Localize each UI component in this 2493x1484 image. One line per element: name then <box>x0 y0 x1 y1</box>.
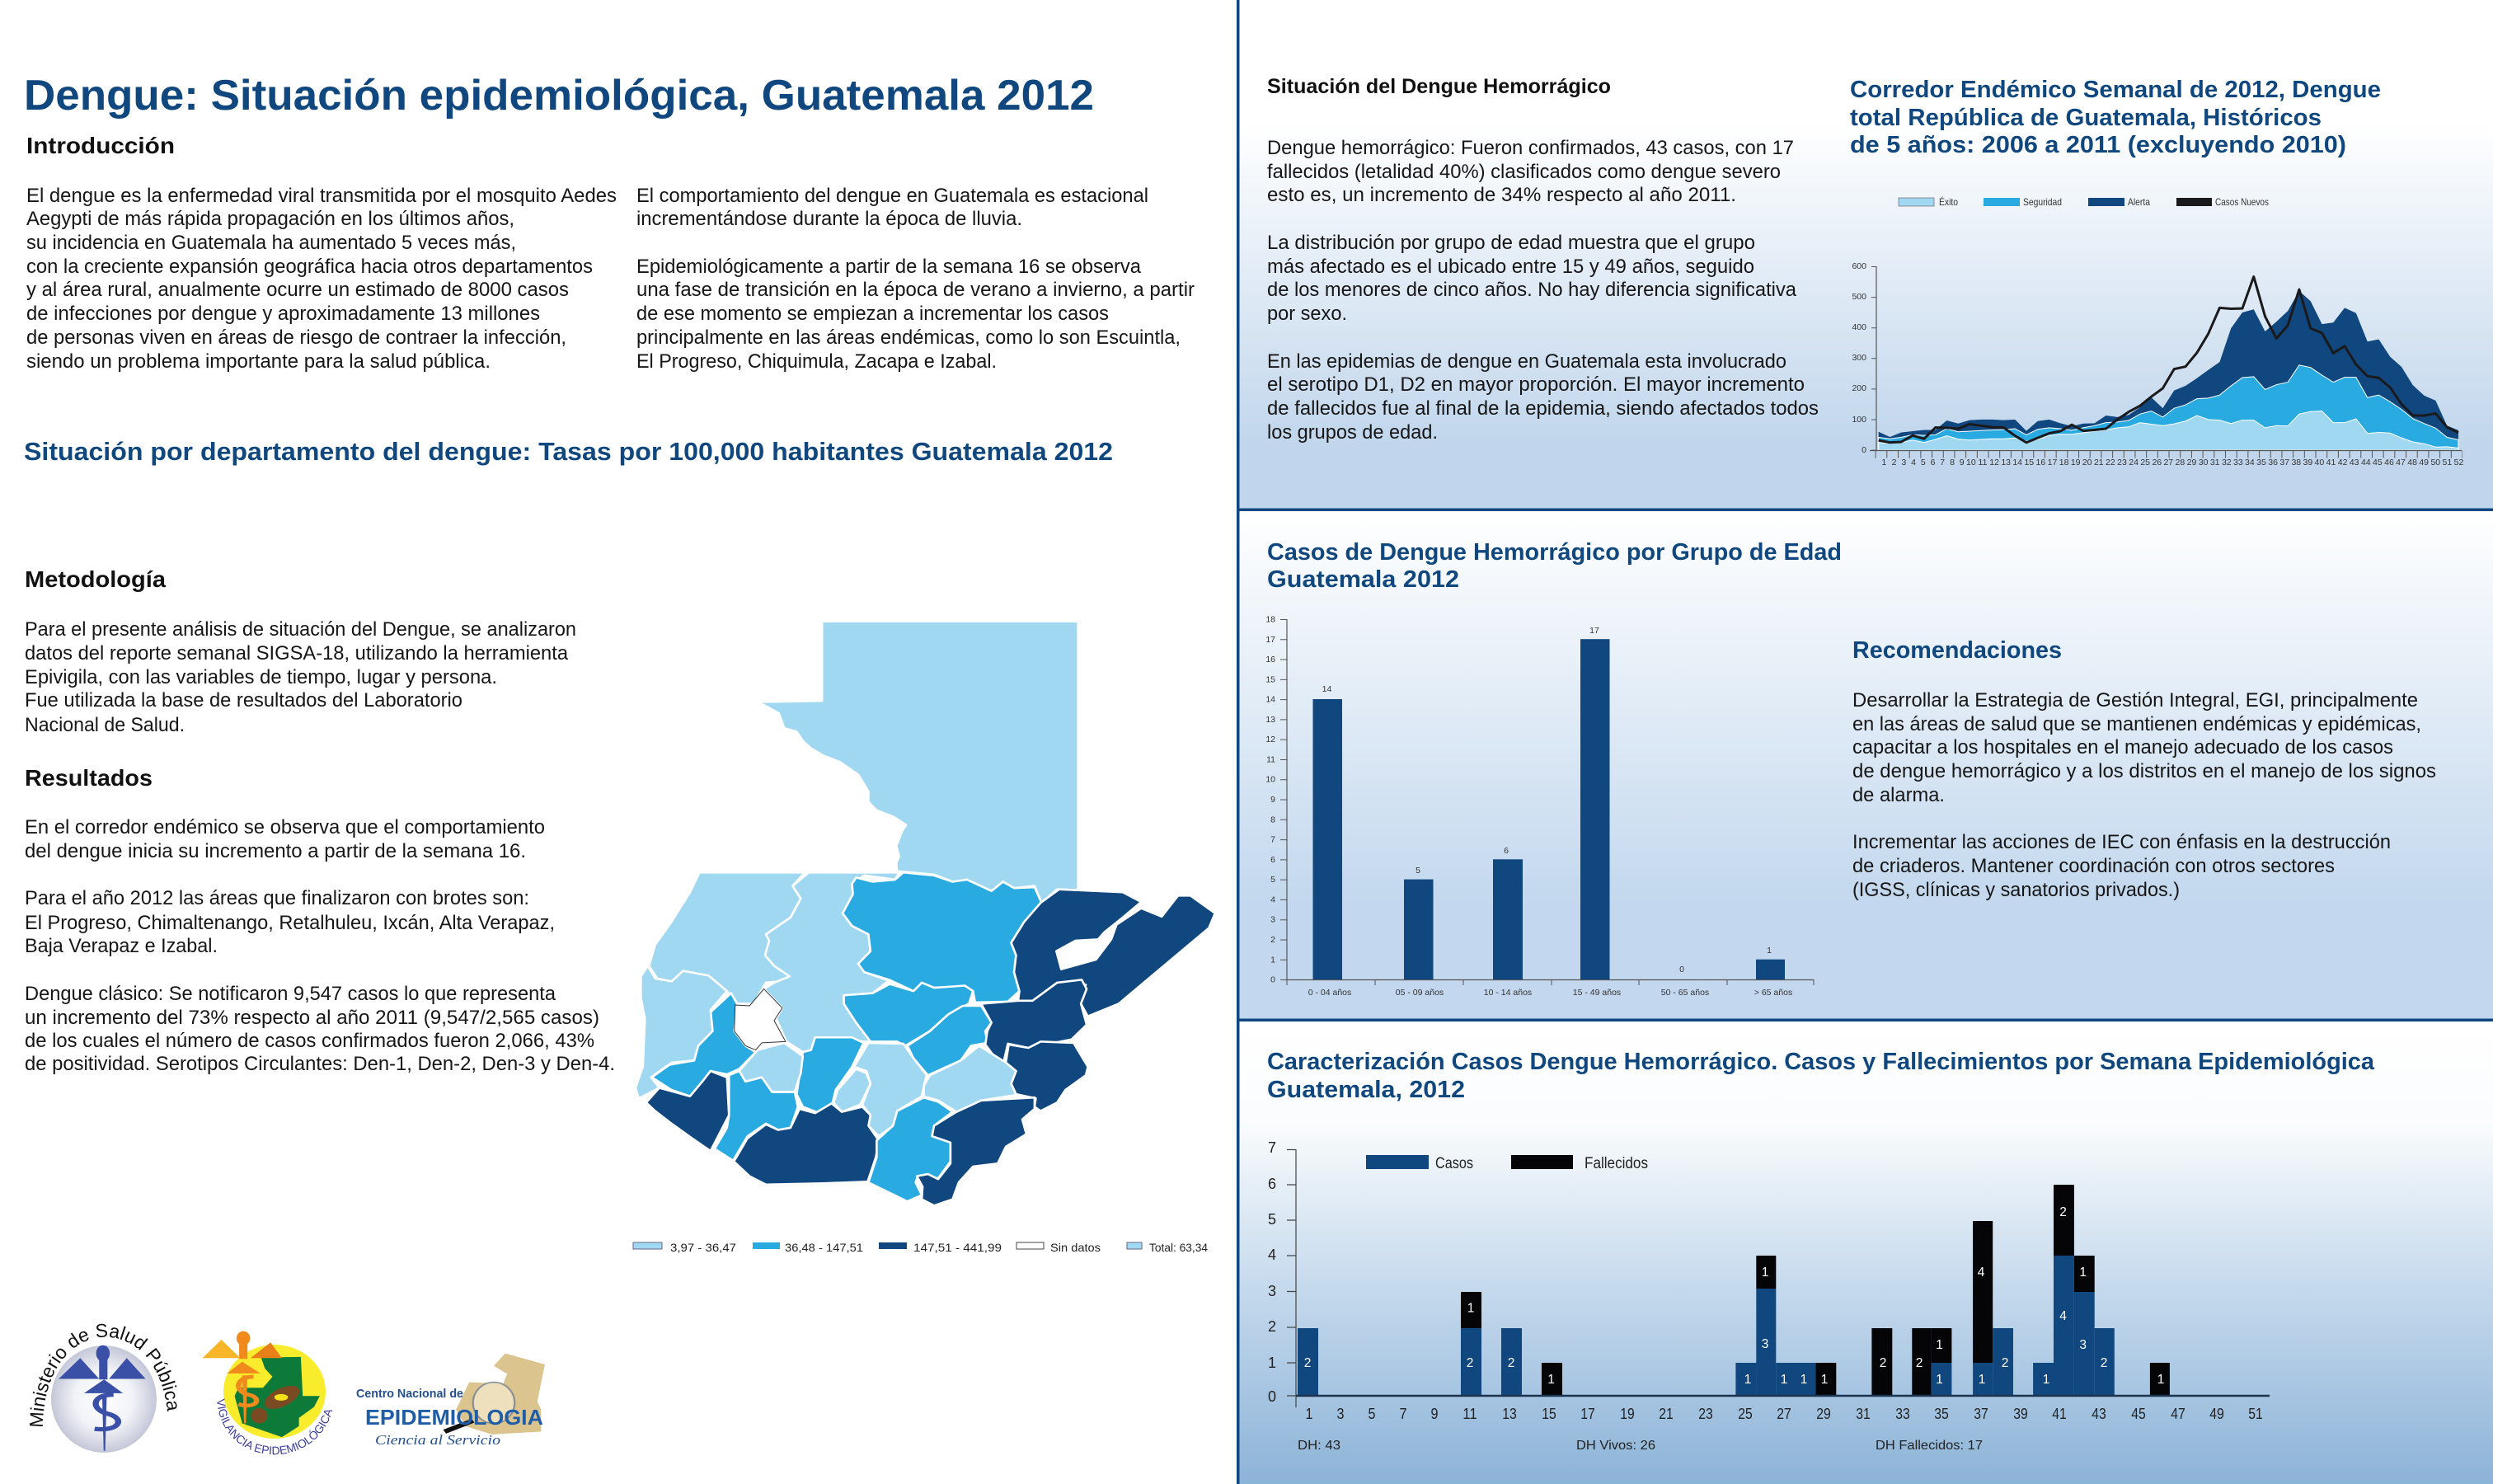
chart: corredor endémico area and line: 8 <box>1950 458 1955 467</box>
text block: metodología: Para el presente análisis de situación del Dengue, se analizaron <box>25 618 576 641</box>
chart: corredor endémico area and line: 9 <box>1960 458 1965 467</box>
stacked bar chart: casos y fallecidos por semana: 1 <box>1306 1406 1312 1422</box>
chart: corredor endémico area and line: 27 <box>2163 458 2173 467</box>
chart: corredor endémico area and line: 22 <box>2106 458 2115 467</box>
stacked bar chart: casos y fallecidos por semana: 45 <box>2131 1406 2146 1422</box>
bar chart: grupo de edad: 10 - 14 años <box>1484 988 1532 998</box>
text block: recomendaciones: de alarma. <box>1852 784 1945 806</box>
bar chart: grupo de edad <box>1265 615 1814 998</box>
chart: corredor endémico area and line: 44 <box>2361 458 2371 467</box>
chart: corredor endémico area and line: 30 <box>2199 458 2209 467</box>
heading: corredor endémico: total República de Guatemala, Históricos <box>1850 105 2322 131</box>
chart: corredor endémico area and line: 23 <box>2117 458 2127 467</box>
map legend: 147,51 - 441,99 <box>913 1241 1002 1254</box>
bar chart: grupo de edad: 7 <box>1270 835 1275 845</box>
stacked bar chart: casos y fallecidos por semana: 2 <box>2002 1356 2008 1370</box>
stacked bar chart: casos y fallecidos por semana: 3 <box>2079 1338 2087 1352</box>
chart: corredor endémico area and line: 35 <box>2256 458 2266 467</box>
text block: recomendaciones: en las áreas de salud que se mantienen endémicas y epidémicas, <box>1852 713 2421 735</box>
text block: dengue hemorrágico: fallecidos (letalidad 40%) clasificados como dengue severo <box>1267 161 1781 183</box>
stacked bar chart: casos y fallecidos por semana: 39 <box>2013 1406 2028 1422</box>
text block: introducción column 1: siendo un problema importante para la salud pública. <box>26 350 491 373</box>
heading: corredor endémico: Corredor Endémico Semanal de 2012, Dengue <box>1850 77 2381 103</box>
chart: corredor endémico area and line: 11 <box>1979 458 1988 467</box>
stacked bar chart: casos y fallecidos por semana: 17 <box>1580 1406 1595 1422</box>
title: Dengue: Situación epidemiológica, Guatemala 2012 <box>24 72 1094 120</box>
stacked bar chart: casos y fallecidos por semana: 1 <box>2043 1373 2049 1387</box>
text block: dengue hemorrágico <box>1267 137 1819 444</box>
text block: dengue hemorrágico: La distribución por grupo de edad muestra que el grupo <box>1267 232 1755 254</box>
text block: introducción column 2: El comportamiento del dengue en Guatemala es estacional <box>636 185 1148 207</box>
chart: corredor endémico area and line: 28 <box>2176 458 2185 467</box>
bar chart: grupo de edad: 0 <box>1270 975 1275 985</box>
text block: metodología: Fue utilizada la base de resultados del Laboratorio <box>25 689 462 711</box>
map legend: Total: 63,34 <box>1149 1241 1208 1254</box>
stacked bar chart: casos y fallecidos por semana: 11 <box>1462 1406 1477 1422</box>
stacked bar chart: casos y fallecidos por semana: 49 <box>2209 1406 2224 1422</box>
text block: dengue hemorrágico: de los menores de cinco años. No hay diferencia significativa <box>1267 279 1797 301</box>
stacked bar chart: casos y fallecidos por semana: 7 <box>1400 1406 1406 1422</box>
heading: resultados: Resultados <box>25 765 153 791</box>
chart: corredor endémico area and line: 37 <box>2279 458 2289 467</box>
panel: metodología <box>25 566 576 736</box>
heading: casos por grupo de edad <box>1267 539 1842 593</box>
stacked bar chart: casos y fallecidos por semana: 2 <box>1916 1356 1923 1370</box>
chart: corredor endémico area and line: 20 <box>2082 458 2092 467</box>
chart: corredor endémico area and line: 47 <box>2396 458 2406 467</box>
bar chart: grupo de edad: 15 - 49 años <box>1573 988 1621 998</box>
chart: corredor endémico area and line: 600 <box>1852 261 1866 271</box>
bar chart: grupo de edad: 6 <box>1504 846 1509 856</box>
text block: metodología: Epivigila, con las variables de tiempo, lugar y persona. <box>25 666 497 688</box>
legend: corredor endémico: Casos Nuevos <box>2215 196 2269 208</box>
panel: casos por grupo de edad y recomendaciones <box>1239 511 2493 1019</box>
heading: casos por grupo de edad: Casos de Dengue Hemorrágico por Grupo de Edad <box>1267 539 1842 566</box>
text block: introducción column 1: con la creciente expansión geográfica hacia otros departamentos <box>26 256 593 278</box>
stacked bar chart: casos y fallecidos por semana <box>1268 1139 2270 1422</box>
chart: corredor endémico area and line: 7 <box>1940 458 1945 467</box>
bar chart: grupo de edad: 1 <box>1270 955 1275 965</box>
stacked bar chart: casos y fallecidos por semana: 51 <box>2248 1406 2263 1422</box>
text block: recomendaciones: Desarrollar la Estrategia de Gestión Integral, EGI, principalmente <box>1852 689 2418 711</box>
stacked bar chart: casos y fallecidos por semana: 35 <box>1934 1406 1949 1422</box>
stacked bar chart: casos y fallecidos por semana: 6 <box>1268 1176 1276 1192</box>
text block: dengue hemorrágico: el serotipo D1, D2 en mayor proporción. El mayor incremento <box>1267 373 1805 396</box>
stacked bar chart: casos y fallecidos por semana: 23 <box>1698 1406 1713 1422</box>
stacked bar chart: casos y fallecidos por semana: 13 <box>1502 1406 1517 1422</box>
stacked bar chart: casos y fallecidos por semana: 2 <box>1304 1356 1311 1370</box>
bar chart: grupo de edad: 0 - 04 años <box>1308 988 1351 998</box>
text block: introducción column 2: Epidemiológicamente a partir de la semana 16 se observa <box>636 256 1142 278</box>
chart: corredor endémico area and line: 29 <box>2187 458 2196 467</box>
text block: dengue hemorrágico: los grupos de edad. <box>1267 421 1438 444</box>
chart: corredor endémico area and line: 16 <box>2036 458 2045 467</box>
bar chart: grupo de edad: 12 <box>1265 735 1275 744</box>
bar chart: grupo de edad: 1 <box>1767 946 1772 956</box>
text block: introducción column 2: El Progreso, Chiquimula, Zacapa e Izabal. <box>636 350 997 373</box>
stacked bar chart: casos y fallecidos por semana: 2 <box>2101 1356 2107 1370</box>
heading: corredor endémico: de 5 años: 2006 a 2011 (excluyendo 2010) <box>1850 132 2346 158</box>
chart: corredor endémico area and line: 46 <box>2384 458 2394 467</box>
map: Guatemala departments <box>636 622 1215 1205</box>
chart: corredor endémico area and line: 200 <box>1852 383 1866 393</box>
map legend: 36,48 - 147,51 <box>785 1241 863 1254</box>
map legend: Sin datos <box>1050 1241 1101 1254</box>
text block: introducción column 2 <box>636 185 1195 373</box>
chart: corredor endémico area and line: 38 <box>2291 458 2301 467</box>
stacked bar chart: casos y fallecidos por semana: 21 <box>1659 1406 1674 1422</box>
stacked bar chart: casos y fallecidos por semana: 31 <box>1856 1406 1871 1422</box>
legend: corredor endémico <box>1899 195 2269 208</box>
bar chart: grupo de edad: 14 <box>1265 695 1275 705</box>
stacked bar chart: casos y fallecidos por semana: 41 <box>2052 1406 2067 1422</box>
logo: Centro Nacional de Epidemiología: Ciencia al Servicio <box>375 1432 500 1448</box>
chart: corredor endémico area and line: 32 <box>2222 458 2232 467</box>
bar chart: grupo de edad: 16 <box>1265 655 1275 665</box>
map legend <box>633 1241 1208 1254</box>
legend: casos y fallecidos: Fallecidos <box>1585 1155 1648 1172</box>
stacked bar chart: casos y fallecidos por semana: 4 <box>1978 1266 1985 1280</box>
text block: introducción column 1 <box>26 185 617 373</box>
bar chart: grupo de edad: > 65 años <box>1754 988 1792 998</box>
chart: corredor endémico area and line: 5 <box>1921 458 1926 467</box>
stacked bar chart: casos y fallecidos por semana: 7 <box>1268 1139 1276 1156</box>
chart: corredor endémico area and line: 26 <box>2152 458 2162 467</box>
text block: introducción column 2: una fase de transición en la época de verano a invierno, a partir <box>636 279 1195 301</box>
logo: Centro Nacional de Epidemiología: EPIDEMIOLOGIA <box>365 1405 543 1430</box>
text block: dengue hemorrágico: por sexo. <box>1267 303 1347 325</box>
stacked bar chart: casos y fallecidos por semana: 1 <box>1547 1373 1555 1387</box>
panel: situación del dengue hemorrágico y corredor endémico <box>1239 0 2493 509</box>
stacked bar chart: casos y fallecidos por semana: 1 <box>1781 1373 1787 1387</box>
chart: corredor endémico area and line: 1 <box>1881 458 1886 467</box>
text block: recomendaciones: de dengue hemorrágico y a los distritos en el manejo de los signos <box>1852 760 2436 782</box>
stacked bar chart: casos y fallecidos por semana: 2 <box>1268 1318 1276 1335</box>
chart: corredor endémico area and line: 0 <box>1862 445 1866 455</box>
bar chart: grupo de edad: 05 - 09 años <box>1396 988 1444 998</box>
stacked bar chart: casos y fallecidos por semana: 27 <box>1777 1406 1791 1422</box>
legend: corredor endémico: Éxito <box>1939 195 1958 208</box>
stats: totales: DH Fallecidos: 17 <box>1876 1439 1983 1453</box>
panel: casos y fallecimientos por semana <box>1239 1021 2493 1484</box>
bar chart: grupo de edad: 17 <box>1265 635 1275 645</box>
text block: introducción column 2: de ese momento se empiezan a incrementar los casos <box>636 303 1109 325</box>
chart: corredor endémico area and line: 31 <box>2210 458 2220 467</box>
bar chart: grupo de edad: 15 <box>1265 674 1275 684</box>
chart: corredor endémico area and line: 18 <box>2059 458 2069 467</box>
stacked bar chart: casos y fallecidos por semana: 1 <box>1821 1373 1828 1387</box>
heading: caracterización casos: Caracterización Casos Dengue Hemorrágico. Casos y Fallecimientos por Semana Epidemiológica <box>1267 1049 2375 1075</box>
text block: resultados: del dengue inicia su incremento a partir de la semana 16. <box>25 840 526 862</box>
stacked bar chart: casos y fallecidos por semana: 5 <box>1369 1406 1375 1422</box>
chart: corredor endémico area and line: 50 <box>2430 458 2440 467</box>
heading: metodología: Metodología <box>25 566 166 592</box>
chart: corredor endémico area and line: 500 <box>1852 292 1866 302</box>
chart: corredor endémico area and line: 13 <box>2001 458 2011 467</box>
text block: metodología: datos del reporte semanal SIGSA-18, utilizando la herramienta <box>25 642 569 665</box>
chart: corredor endémico area and line: 300 <box>1852 353 1866 363</box>
chart: corredor endémico area and line: 10 <box>1966 458 1976 467</box>
stacked bar chart: casos y fallecidos por semana: 19 <box>1620 1406 1635 1422</box>
stacked bar chart: casos y fallecidos por semana: 37 <box>1974 1406 1988 1422</box>
text block: resultados: Para el año 2012 las áreas que finalizaron con brotes son: <box>25 887 529 909</box>
chart: corredor endémico area and line: 400 <box>1852 322 1866 332</box>
heading: casos por grupo de edad: Guatemala 2012 <box>1267 566 1459 593</box>
chart: corredor endémico area and line: 4 <box>1911 458 1916 467</box>
chart: corredor endémico area and line: 14 <box>2012 458 2022 467</box>
stacked bar chart: casos y fallecidos por semana: 2 <box>1880 1356 1886 1370</box>
stacked bar chart: casos y fallecidos por semana: 33 <box>1895 1406 1910 1422</box>
stacked bar chart: casos y fallecidos por semana: 4 <box>1268 1247 1276 1263</box>
bar chart: grupo de edad: 14 <box>1322 684 1331 694</box>
text block: resultados: El Progreso, Chimaltenango, Retalhuleu, Ixcán, Alta Verapaz, <box>25 912 555 934</box>
bar chart: grupo de edad: 8 <box>1270 815 1275 824</box>
chart: corredor endémico area and line: 39 <box>2303 458 2312 467</box>
chart: corredor endémico area and line: 33 <box>2233 458 2243 467</box>
stacked bar chart: casos y fallecidos por semana: 3 <box>1337 1406 1344 1422</box>
text block: recomendaciones <box>1852 689 2436 901</box>
stacked bar chart: casos y fallecidos por semana: 1 <box>2157 1373 2164 1387</box>
map legend: 3,97 - 36,47 <box>670 1241 736 1254</box>
bar chart: grupo de edad: 2 <box>1270 935 1275 945</box>
text block: resultados: En el corredor endémico se observa que el comportamiento <box>25 816 545 838</box>
stacked bar chart: casos y fallecidos por semana: 4 <box>2059 1309 2067 1323</box>
legend: corredor endémico: Alerta <box>2128 196 2150 208</box>
chart: corredor endémico area and line: 43 <box>2350 458 2359 467</box>
text block: dengue hemorrágico: Dengue hemorrágico: Fueron confirmados, 43 casos, con 17 <box>1267 137 1794 159</box>
text block: recomendaciones: de criaderos. Mantener coordinación con otros sectores <box>1852 855 2335 877</box>
text block: recomendaciones: (IGSS, clínicas y sanatorios privados.) <box>1852 879 2180 901</box>
chart: corredor endémico area and line: 6 <box>1931 458 1936 467</box>
bar chart: grupo de edad: 5 <box>1270 875 1275 885</box>
text block: resultados: Dengue clásico: Se notificaron 9,547 casos lo que representa <box>25 983 556 1005</box>
stacked bar chart: casos y fallecidos por semana: 1 <box>1979 1373 1985 1387</box>
stacked bar chart: casos y fallecidos por semana: 47 <box>2171 1406 2185 1422</box>
bar chart: grupo de edad: 13 <box>1265 715 1275 725</box>
heading: recomendaciones: Recomendaciones <box>1852 637 2062 664</box>
chart: corredor endémico area and line: 17 <box>2048 458 2057 467</box>
bar chart: grupo de edad: 17 <box>1589 626 1599 636</box>
stacked bar chart: casos y fallecidos por semana: 43 <box>2092 1406 2106 1422</box>
stacked bar chart: casos y fallecidos por semana: 25 <box>1738 1406 1753 1422</box>
stacked bar chart: casos y fallecidos por semana: 0 <box>1268 1388 1276 1405</box>
text block: resultados: de positividad. Serotipos Circulantes: Den-1, Den-2, Den-3 y Den-4. <box>25 1053 615 1075</box>
chart: corredor endémico area and line: 34 <box>2245 458 2255 467</box>
panel: introducción <box>26 133 1195 373</box>
text block: recomendaciones: Incrementar las acciones de IEC con énfasis en la destrucción <box>1852 831 2391 853</box>
chart: corredor endémico area and line: 19 <box>2071 458 2081 467</box>
text block: introducción column 1: Aegypti de más rápida propagación en los últimos años, <box>26 208 514 230</box>
logo: Vigilancia Epidemiológica <box>203 1331 333 1454</box>
chart: corredor endémico area and line: 41 <box>2326 458 2336 467</box>
chart: corredor endémico area and line: 42 <box>2338 458 2348 467</box>
stacked bar chart: casos y fallecidos por semana: 5 <box>1268 1211 1276 1228</box>
stacked bar chart: casos y fallecidos por semana: 1 <box>1744 1373 1751 1387</box>
chart: corredor endémico area and line: 21 <box>2094 458 2104 467</box>
stats: totales <box>1298 1439 1983 1453</box>
bar chart: grupo de edad: 5 <box>1416 866 1420 876</box>
stacked bar chart: casos y fallecidos por semana: 29 <box>1816 1406 1831 1422</box>
chart: corredor endémico area and line: 3 <box>1901 458 1906 467</box>
bar chart: grupo de edad: 50 - 65 años <box>1661 988 1709 998</box>
chart: corredor endémico area and line: 48 <box>2407 458 2417 467</box>
bar chart: grupo de edad: 9 <box>1270 795 1275 805</box>
text block: resultados: Baja Verapaz e Izabal. <box>25 935 218 957</box>
chart: corredor endémico area and line: 45 <box>2373 458 2383 467</box>
text block: resultados: de los cuales el número de casos confirmados fueron 2,066, 43% <box>25 1030 594 1052</box>
text block: introducción column 2: principalmente en las áreas endémicas, como lo son Escuintla, <box>636 326 1181 349</box>
legend: casos y fallecidos: Casos <box>1435 1155 1473 1172</box>
text block: metodología: Nacional de Salud. <box>25 714 185 736</box>
text block: introducción column 1: su incidencia en Guatemala ha aumentado 5 veces más, <box>26 232 516 254</box>
stacked bar chart: casos y fallecidos por semana: 9 <box>1431 1406 1438 1422</box>
stacked bar chart: casos y fallecidos por semana: 3 <box>1762 1337 1768 1351</box>
text block: recomendaciones: capacitar a los hospitales en el manejo adecuado de los casos <box>1852 736 2393 758</box>
text block: dengue hemorrágico: más afectado es el ubicado entre 15 y 49 años, seguido <box>1267 256 1754 278</box>
chart: corredor endémico area and line: 40 <box>2315 458 2324 467</box>
bar chart: grupo de edad: 11 <box>1266 755 1275 765</box>
heading: corredor endémico <box>1850 77 2381 158</box>
chart: corredor endémico area and line: 2 <box>1892 458 1897 467</box>
heading: situación por departamento: Situación por departamento del dengue: Tasas por 100,000 habitantes Guatemala 2012 <box>24 437 1113 466</box>
bar chart: grupo de edad: 0 <box>1679 965 1684 974</box>
text block: resultados <box>25 816 615 1075</box>
stacked bar chart: casos y fallecidos por semana: 1 <box>1762 1266 1768 1280</box>
chart: corredor endémico area and line: 51 <box>2443 458 2452 467</box>
stacked bar chart: casos y fallecidos por semana: 1 <box>1800 1373 1807 1387</box>
chart: corredor endémico area and line: 15 <box>2024 458 2034 467</box>
stats: totales: DH: 43 <box>1298 1439 1340 1453</box>
chart: corredor endémico area and line: 25 <box>2140 458 2150 467</box>
logo: Ministerio de Salud Pública: Ministerio de Salud Pública <box>30 1324 177 1426</box>
heading: caracterización casos <box>1267 1049 2375 1103</box>
chart: corredor endémico area and line: 36 <box>2268 458 2278 467</box>
chart: corredor endémico area and line: 24 <box>2129 458 2139 467</box>
chart: corredor endémico area and line <box>1852 261 2463 467</box>
bar chart: grupo de edad: 3 <box>1270 915 1275 925</box>
stacked bar chart: casos y fallecidos por semana: 2 <box>1467 1356 1473 1370</box>
stats: totales: DH Vivos: 26 <box>1576 1439 1655 1453</box>
stacked bar chart: casos y fallecidos por semana: 1 <box>2079 1266 2087 1280</box>
text block: dengue hemorrágico: En las epidemias de dengue en Guatemala esta involucrado <box>1267 350 1786 373</box>
bar chart: grupo de edad: 4 <box>1270 895 1275 904</box>
chart: corredor endémico area and line: 12 <box>1989 458 1999 467</box>
text block: introducción column 2: incrementándose durante la época de lluvia. <box>636 208 1022 230</box>
legend: casos y fallecidos <box>1366 1155 1648 1172</box>
bar chart: grupo de edad: 10 <box>1265 775 1275 785</box>
bar chart: grupo de edad: 18 <box>1265 615 1275 625</box>
text block: dengue hemorrágico: esto es, un incremento de 34% respecto al año 2011. <box>1267 184 1736 206</box>
text block: introducción column 1: y al área rural, anualmente ocurre un estimado de 8000 casos <box>26 279 569 301</box>
stacked bar chart: casos y fallecidos por semana: 1 <box>1268 1355 1276 1371</box>
stacked bar chart: casos y fallecidos por semana: 15 <box>1542 1406 1556 1422</box>
logo: Centro Nacional de Epidemiología: Centro Nacional de <box>356 1387 463 1401</box>
stacked bar chart: casos y fallecidos por semana: 2 <box>1508 1356 1514 1370</box>
text block: dengue hemorrágico: de fallecidos fue al final de la epidemia, siendo afectados todos <box>1267 397 1819 420</box>
stacked bar chart: casos y fallecidos por semana: 3 <box>1268 1283 1276 1299</box>
stacked bar chart: casos y fallecidos por semana: 1 <box>1467 1301 1474 1316</box>
logo: Vigilancia Epidemiológica: VIGILANCIA EPIDEMIOLÓGICA <box>217 1398 333 1454</box>
logo: Centro Nacional de Epidemiología <box>356 1354 545 1448</box>
chart: corredor endémico area and line: 100 <box>1852 415 1866 425</box>
heading: caracterización casos: Guatemala, 2012 <box>1267 1077 1465 1103</box>
text block: introducción column 1: de infecciones por dengue y aproximadamente 13 millones <box>26 303 540 325</box>
text block: resultados: un incremento del 73% respecto al año 2011 (9,547/2,565 casos) <box>25 1007 599 1029</box>
panel: resultados <box>25 765 615 1075</box>
text block: introducción column 1: de personas viven en áreas de riesgo de contraer la infección, <box>26 326 566 349</box>
chart: corredor endémico area and line: 52 <box>2454 458 2463 467</box>
legend: corredor endémico: Seguridad <box>2023 196 2062 208</box>
bar chart: grupo de edad: 6 <box>1270 855 1275 865</box>
stacked bar chart: casos y fallecidos por semana: 1 <box>1936 1373 1943 1387</box>
heading: introducción: Introducción <box>26 133 175 158</box>
heading: situación del dengue hemorrágico: Situación del Dengue Hemorrágico <box>1267 75 1611 98</box>
chart: corredor endémico area and line: 49 <box>2419 458 2429 467</box>
text block: introducción column 1: El dengue es la enfermedad viral transmitida por el mosquito Aedes <box>26 185 617 207</box>
text block: metodología <box>25 618 576 736</box>
stacked bar chart: casos y fallecidos por semana: 2 <box>2059 1205 2067 1219</box>
stacked bar chart: casos y fallecidos por semana: 1 <box>1936 1338 1943 1352</box>
